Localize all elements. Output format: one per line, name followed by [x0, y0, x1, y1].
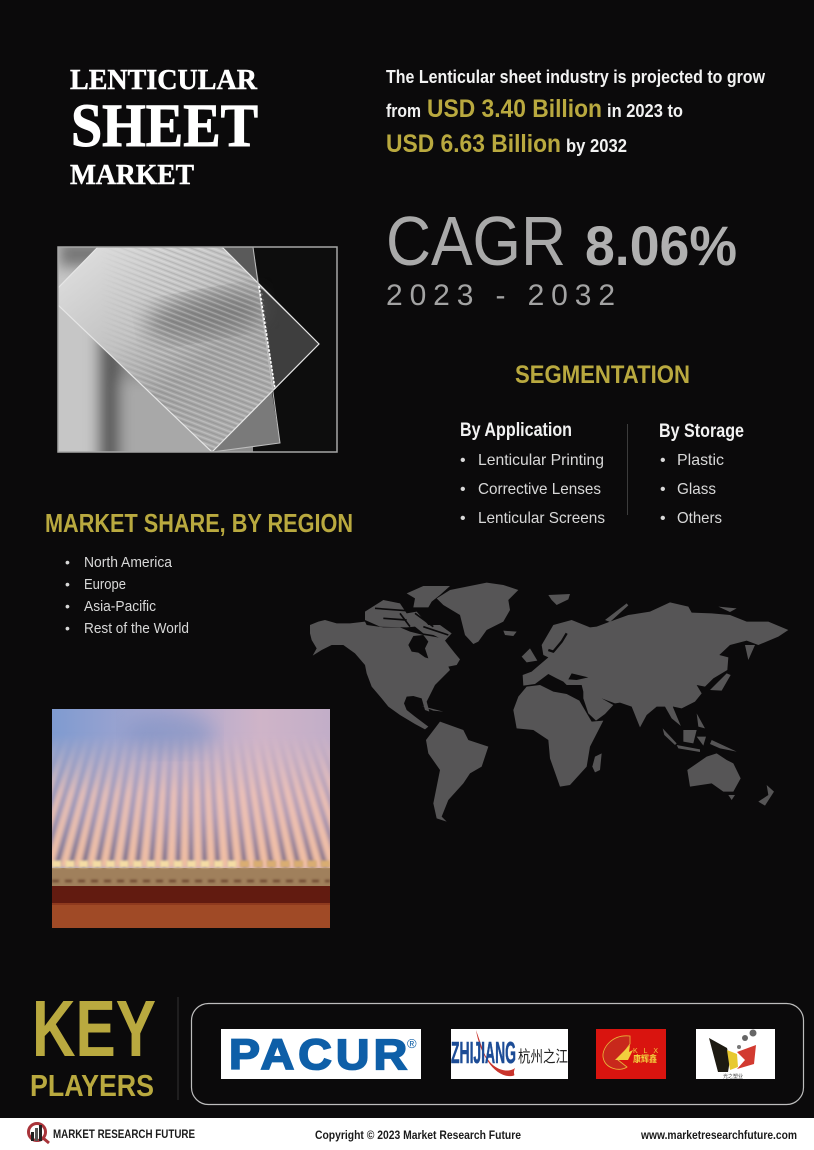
segment list: by storage: Others	[677, 510, 722, 527]
region list: •	[65, 598, 70, 614]
key players panel	[192, 1004, 804, 1104]
logo: Zhijiang: 杭州之江	[518, 1043, 568, 1067]
market projection text: USD 3.40 Billion	[427, 95, 602, 123]
segment list: by storage: Plastic	[677, 452, 724, 469]
title: SHEET	[71, 93, 258, 160]
logo: KLX: KLX	[633, 1048, 658, 1055]
market projection text	[386, 67, 766, 158]
segment list: by application: By Application	[460, 420, 572, 441]
title: MARKET	[70, 159, 194, 191]
logo: PACUR: ®	[407, 1036, 417, 1051]
logo: PACUR: PACUR	[229, 1031, 407, 1079]
region list: •	[65, 576, 70, 592]
image: lenticular sheet photo	[58, 248, 320, 452]
segment list: by storage: By Storage	[659, 421, 744, 442]
logo: black and red emblem	[696, 1029, 775, 1080]
key players heading: PLAYERS	[30, 1068, 154, 1103]
segment list: by storage: •	[660, 481, 666, 498]
logo: KLX: 康辉鑫	[633, 1052, 657, 1065]
market projection text: The Lenticular sheet industry is projected to grow	[386, 67, 766, 87]
segment list: by storage	[659, 421, 744, 527]
market share heading: MARKET SHARE, BY REGION	[45, 508, 353, 538]
segment list: by storage: •	[660, 452, 666, 469]
logo: black and red emblem: 光之塑业	[723, 1073, 743, 1080]
CAGR callout: 8.06%	[585, 214, 737, 277]
segment list: by application: Corrective Lenses	[478, 481, 601, 498]
image frame	[58, 247, 337, 452]
market projection text: from	[386, 101, 421, 121]
segmentation heading: SEGMENTATION	[515, 361, 690, 389]
region list: •	[65, 554, 70, 570]
logo: Zhijiang: ZHIJIANG	[451, 1035, 516, 1070]
logo: KLX	[596, 1029, 666, 1079]
logo: Zhijiang	[451, 1029, 568, 1079]
segment list: by application: •	[460, 481, 466, 498]
segment list: by storage: •	[660, 510, 666, 527]
market projection text: USD 6.63 Billion	[386, 130, 561, 158]
region list	[65, 554, 189, 637]
region list: North America	[84, 555, 173, 571]
region list: Europe	[84, 577, 126, 593]
region list: Asia-Pacific	[84, 599, 156, 615]
CAGR callout: 2023 - 2032	[386, 279, 615, 312]
footer copyright: Copyright © 2023 Market Research Future	[315, 1128, 521, 1142]
key players heading: KEY	[32, 984, 156, 1073]
image: lens close-up photo	[52, 709, 330, 928]
segment list: by storage: Glass	[677, 481, 716, 498]
footer brand: MARKET RESEARCH FUTURE	[53, 1127, 195, 1141]
footer bar	[0, 1118, 814, 1150]
CAGR callout: CAGR	[386, 202, 566, 280]
footer logo icon	[28, 1124, 49, 1143]
segment list: by application: •	[460, 510, 466, 527]
segment list: by application: Lenticular Screens	[478, 510, 605, 527]
segment list: by application	[460, 420, 605, 527]
CAGR callout	[386, 202, 737, 312]
key players heading	[30, 984, 156, 1103]
segment list: by application: Lenticular Printing	[478, 452, 604, 469]
market projection text: in 2023 to	[607, 101, 683, 121]
segment list: by application: •	[460, 452, 466, 469]
region list: Rest of the World	[84, 621, 189, 637]
title	[70, 65, 258, 191]
world map	[310, 583, 788, 822]
region list: •	[65, 620, 70, 636]
market projection text: by 2032	[566, 136, 627, 156]
title: LENTICULAR	[70, 65, 258, 96]
